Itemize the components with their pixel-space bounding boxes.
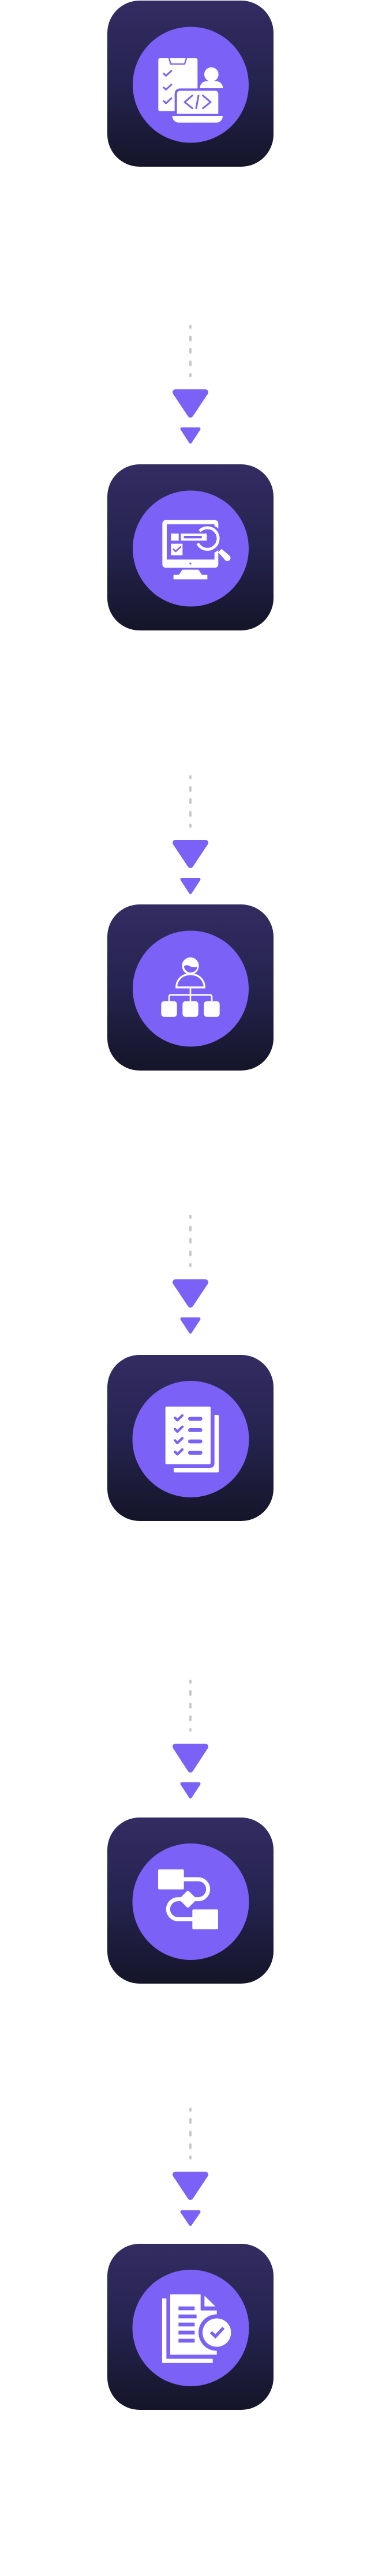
connector 4 [175, 1680, 205, 1797]
tile 3: person and team hierarchy [107, 904, 274, 1071]
icon: checklist, person and laptop [158, 58, 225, 123]
tile 2: monitor and search [107, 464, 274, 630]
tile 4: checklist document [107, 1355, 274, 1521]
icon: document with check badge [162, 2295, 235, 2363]
connector 2 [175, 775, 205, 893]
icon: flowchart [158, 1869, 218, 1929]
icon: checklist pages [166, 1407, 219, 1473]
connector 1 [175, 325, 205, 442]
icon: org chart [161, 957, 220, 1017]
tile 6: approved document [107, 2244, 274, 2410]
icon: monitor with magnifier [162, 520, 231, 579]
connector 5 [175, 2108, 205, 2224]
tile 5: process flow [107, 1818, 274, 1984]
connector 3 [175, 1215, 205, 1332]
tile 1: requirements and code [107, 1, 274, 167]
